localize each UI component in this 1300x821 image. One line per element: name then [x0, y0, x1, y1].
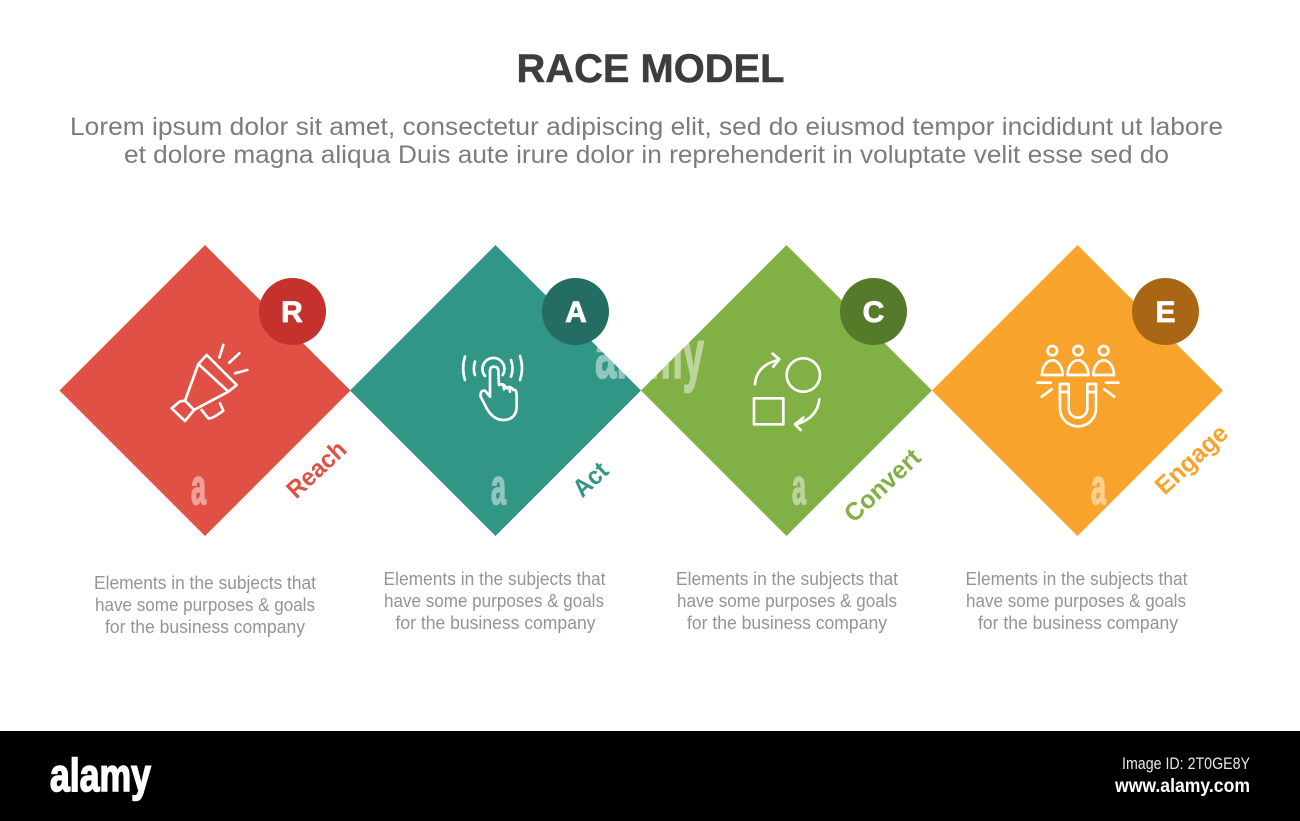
description: convert: have some purposes & goals	[677, 591, 897, 611]
description: reach: have some purposes & goals	[95, 595, 315, 615]
badge R: R	[281, 296, 303, 329]
description: engage: have some purposes & goals	[966, 591, 1186, 611]
description: act: for the business company	[396, 613, 596, 633]
description: convert: for the business company	[687, 613, 887, 633]
badge A	[542, 278, 609, 345]
description: convert	[676, 569, 898, 633]
panel: convert	[641, 245, 932, 633]
subtitle text	[70, 113, 1223, 169]
description: act: have some purposes & goals	[384, 591, 604, 611]
description: convert: Elements in the subjects that	[676, 569, 898, 589]
label: Engage: Engage	[1150, 419, 1234, 500]
watermark glyph: a	[1091, 459, 1107, 515]
convert diamond	[641, 245, 932, 536]
engage diamond	[932, 245, 1223, 536]
act diamond	[350, 245, 641, 536]
description: reach	[94, 573, 316, 637]
icon: conversion cycle	[754, 354, 820, 430]
footer bar	[0, 731, 1300, 821]
watermark glyph: a	[191, 459, 207, 515]
subtitle text: Lorem ipsum dolor sit amet, consectetur adipiscing elit, sed do eiusmod tempor incididunt ut labore	[70, 113, 1223, 141]
badge E: E	[1155, 296, 1176, 329]
description: act: Elements in the subjects that	[384, 569, 606, 589]
subtitle text: et dolore magna aliqua Duis aute irure dolor in reprehenderit in voluptate velit esse sed do	[124, 141, 1169, 169]
label: Act: Act	[567, 456, 615, 503]
watermark glyph: a	[792, 459, 807, 515]
description: reach: for the business company	[105, 617, 305, 637]
badge C: C	[863, 296, 884, 329]
panel: reach	[60, 245, 352, 637]
icon: megaphone	[172, 345, 247, 421]
watermark: alamy across act and convert: alamy	[595, 315, 704, 393]
badge E	[1132, 278, 1199, 345]
description: engage: for the business company	[978, 613, 1178, 633]
site url: www.alamy.com	[1114, 776, 1250, 797]
badge A: A	[565, 296, 587, 329]
description: reach: Elements in the subjects that	[94, 573, 316, 593]
watermark glyph: a	[491, 459, 507, 515]
panel: act	[350, 245, 641, 536]
description: act	[384, 569, 606, 633]
description: engage	[966, 569, 1188, 633]
badge C	[840, 278, 907, 345]
description: engage: Elements in the subjects that	[966, 569, 1188, 589]
panel: engage	[932, 245, 1234, 633]
label: Convert: Convert	[839, 443, 927, 528]
act badge and captions	[384, 278, 615, 633]
title: RACE MODEL	[516, 47, 784, 91]
footer logo: alamy	[50, 749, 151, 801]
icon: pointing hand	[463, 356, 522, 420]
image id: Image ID: 2T0GE8Y	[1122, 754, 1250, 773]
label: Reach: Reach	[281, 435, 352, 504]
badge R	[259, 278, 326, 345]
icon: magnet attracting people	[1037, 346, 1118, 426]
reach diamond	[60, 245, 350, 536]
